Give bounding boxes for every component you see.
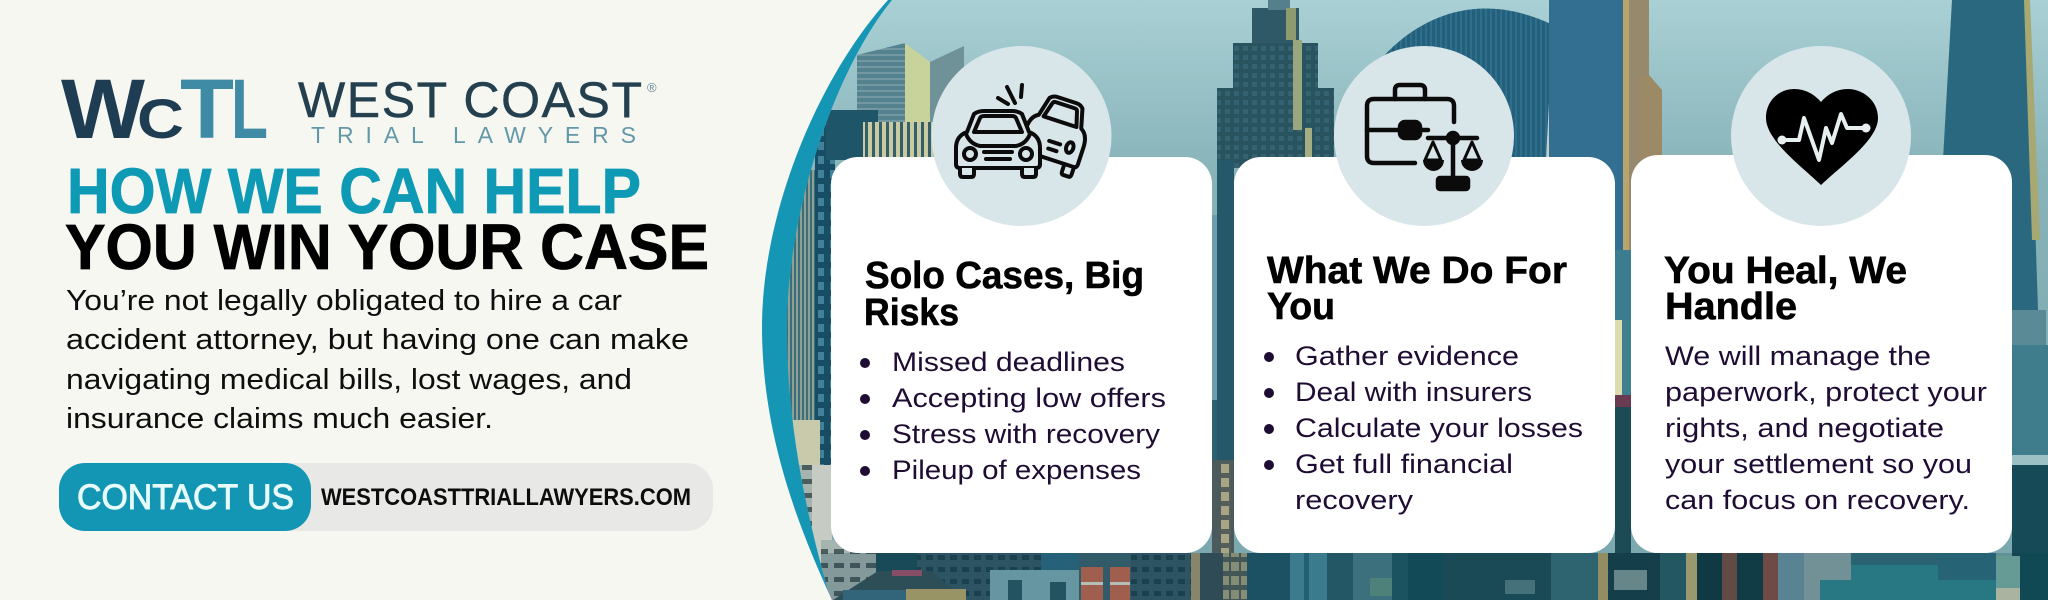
panel: solo cases, big risks (831, 46, 1212, 553)
far-left towers (786, 125, 835, 600)
card body text: your settlement so you (1665, 449, 1972, 479)
icon circle (1731, 46, 1911, 226)
logo monogram: L (231, 62, 268, 156)
card body text (1665, 341, 1987, 515)
contact button (59, 463, 311, 531)
card heading (864, 255, 1144, 334)
card heading: You Heal, We (1664, 250, 1907, 292)
card background (1234, 157, 1615, 553)
bullet list (860, 347, 1166, 485)
intro text block (66, 285, 689, 435)
logo wordmark: ® (647, 80, 657, 95)
title (65, 155, 709, 283)
intro text block: navigating medical bills, lost wages, and (66, 364, 632, 396)
blue dome and tan towers (1380, 0, 1662, 557)
call to action (59, 463, 713, 531)
card body text: can focus on recovery. (1665, 485, 1970, 515)
glass building with yellow face (826, 43, 964, 160)
bullet list: Pileup of expenses (892, 455, 1141, 485)
logo monogram: C (137, 87, 184, 150)
title: YOU WIN YOUR CASE (65, 211, 709, 283)
panel: what we do for you (1234, 46, 1615, 553)
icon circle (1334, 46, 1514, 226)
bullet list: Gather evidence (1295, 341, 1519, 371)
website url: WESTCOASTTRIALLAWYERS.COM (321, 484, 691, 511)
bullet list: Get full financial (1295, 449, 1513, 479)
bullet list: Calculate your losses (1295, 413, 1583, 443)
card heading (1664, 250, 1907, 328)
bullet list: recovery (1295, 485, 1414, 515)
card heading (1267, 250, 1567, 328)
website pill (59, 463, 713, 531)
decorative teal arc (762, 0, 2048, 600)
logo monogram: W (61, 62, 146, 156)
contact label: CONTACT US (77, 478, 294, 517)
logo monogram (61, 62, 268, 156)
icon: car crash (956, 85, 1096, 178)
icon: heart with pulse (1766, 89, 1878, 185)
bullet list: Stress with recovery (892, 419, 1161, 449)
title: HOW WE CAN HELP (67, 155, 641, 227)
bullet list: Deal with insurers (1295, 377, 1532, 407)
card heading: Risks (864, 292, 959, 334)
card heading: Solo Cases, Big (865, 255, 1144, 297)
bullet list (1264, 341, 1583, 515)
city skyline photo (760, 0, 2048, 600)
bullet list: Missed deadlines (892, 347, 1125, 377)
intro text block: You’re not legally obligated to hire a car (66, 285, 622, 317)
logo monogram: T (180, 62, 234, 156)
intro text block: accident attorney, but having one can make (66, 324, 689, 356)
card heading: Handle (1665, 286, 1797, 328)
intro text block: insurance claims much easier. (66, 403, 493, 435)
card background (831, 157, 1212, 553)
icon circle (932, 46, 1112, 226)
right tower (1943, 0, 2048, 600)
logo wordmark: TRIAL LAWYERS (311, 122, 636, 148)
card heading: You (1267, 286, 1335, 328)
central tower (1212, 0, 1334, 555)
card heading: What We Do For (1267, 250, 1567, 292)
icon: briefcase and scales (1367, 85, 1483, 189)
logo wordmark: WEST COAST (298, 72, 642, 128)
panel: you heal, we handle (1631, 46, 2012, 553)
card background (1631, 155, 2012, 553)
card body text: We will manage the (1665, 341, 1931, 371)
bullet list: Accepting low offers (892, 383, 1166, 413)
card body text: rights, and negotiate (1665, 413, 1944, 443)
company logo (61, 62, 657, 156)
card body text: paperwork, protect your (1665, 377, 1987, 407)
lower city strip (821, 540, 2048, 600)
